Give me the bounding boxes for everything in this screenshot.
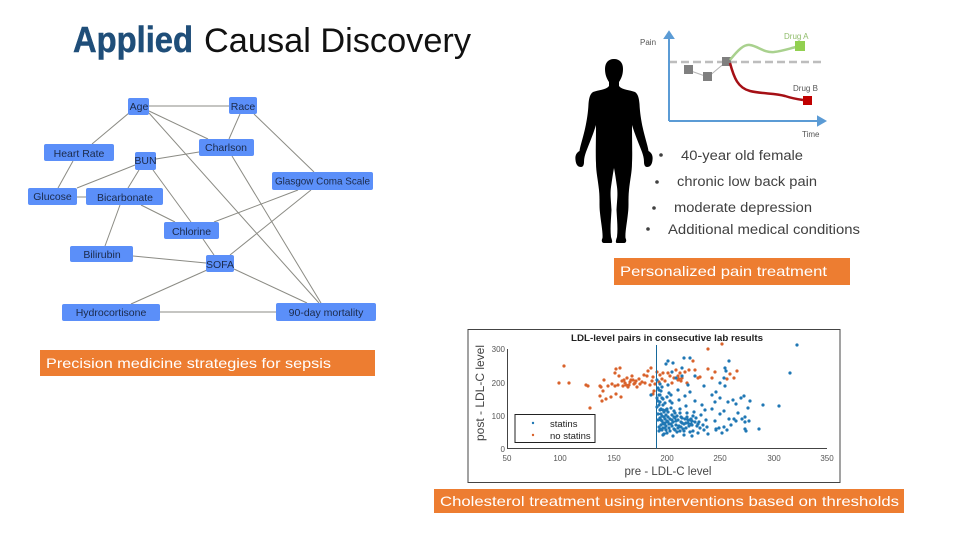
caption: Cholesterol treatment: Cholesterol treatment using interventions based on thresholds xyxy=(440,493,899,509)
Drug A curve xyxy=(730,45,796,60)
x axis ticks: 300 xyxy=(767,454,781,463)
title word: Applied: Applied xyxy=(73,19,193,60)
dashed threshold xyxy=(669,61,824,63)
x axis ticks: 350 xyxy=(820,454,834,463)
chart: pain over time xyxy=(640,32,825,139)
node: Glasgow Coma Scale xyxy=(272,172,373,190)
node: Glucose: Glucose xyxy=(33,191,72,203)
node: Heart Rate: Heart Rate xyxy=(54,148,105,160)
caption: Precision medicine xyxy=(40,350,375,376)
blue points: statins xyxy=(651,345,797,436)
y axis ticks: 100 xyxy=(492,412,506,421)
title words: Causal Discovery: Causal Discovery xyxy=(204,22,471,60)
node: 90-day mortality xyxy=(276,303,376,321)
node: Age xyxy=(128,98,149,115)
Drug B point xyxy=(803,96,812,105)
legend: no statins xyxy=(550,431,591,442)
x axis label: pre - LDL-C level xyxy=(625,466,711,478)
orange points: no statins xyxy=(559,344,737,408)
history points xyxy=(684,57,731,81)
node: Bicarbonate xyxy=(86,188,163,205)
label: Drug B: Drug B xyxy=(793,84,818,93)
graph edges xyxy=(58,106,321,312)
gray history line xyxy=(688,61,727,77)
caption: Personalized pain treatment xyxy=(614,258,850,285)
node: Race xyxy=(229,97,257,114)
node: BUN: BUN xyxy=(134,155,157,167)
caption: Precision medicine: Precision medicine strategies for sepsis xyxy=(46,355,331,371)
y axis arrow xyxy=(665,32,673,121)
node: Glucose xyxy=(28,188,77,205)
y axis ticks: 300 xyxy=(492,345,506,354)
x axis ticks: 100 xyxy=(553,454,567,463)
x axis ticks: 200 xyxy=(660,454,674,463)
caption: Personalized pain treatment: Personalized pain treatment xyxy=(620,263,827,279)
bullet 4: Additional medical conditions xyxy=(668,222,860,237)
bullet 1: 40-year old female xyxy=(681,148,803,163)
y axis ticks xyxy=(492,345,506,454)
node: Hydrocortisone: Hydrocortisone xyxy=(76,307,146,319)
bullet 2: chronic low back pain xyxy=(677,174,817,189)
node: Bilirubin: Bilirubin xyxy=(83,249,121,261)
y axis label: post - LDL-C level xyxy=(473,345,487,441)
label: Drug A: Drug A xyxy=(784,32,809,41)
patient bullet list xyxy=(646,148,860,237)
bullet 3: moderate depression xyxy=(674,200,812,215)
legend xyxy=(515,414,595,442)
panel: LDL scatter plot xyxy=(468,330,840,482)
node: SOFA: SOFA xyxy=(206,259,234,271)
node: Chlorine: Chlorine xyxy=(172,226,211,238)
x axis ticks xyxy=(503,454,834,463)
node: Glasgow Coma Scale: Glasgow Coma Scale xyxy=(275,176,370,188)
node: Race: Race xyxy=(231,101,255,113)
Drug B curve xyxy=(730,63,803,100)
x axis ticks: 150 xyxy=(607,454,621,463)
node: Hydrocortisone xyxy=(62,304,160,321)
Drug A point xyxy=(795,41,805,51)
node: Age: Age xyxy=(130,101,148,113)
y axis ticks: 0 xyxy=(501,445,506,454)
legend: statins xyxy=(550,419,578,430)
node: BUN xyxy=(134,152,157,170)
node: Chlorine xyxy=(164,222,219,239)
threshold line xyxy=(656,345,658,448)
icon: human silhouette xyxy=(575,59,653,243)
label: Time: Time xyxy=(802,130,820,139)
caption: Cholesterol treatment xyxy=(434,489,904,513)
node: Charlson: Charlson xyxy=(205,142,247,154)
panel: causal graph xyxy=(28,97,376,321)
label: Pain: Pain xyxy=(640,38,656,47)
plot title: LDL-level pairs in consecutive lab results xyxy=(571,333,763,344)
node: Bilirubin xyxy=(70,246,133,262)
x axis arrow xyxy=(669,117,825,125)
y axis ticks: 200 xyxy=(492,379,506,388)
node: Bicarbonate: Bicarbonate xyxy=(97,192,153,204)
axes xyxy=(508,349,827,448)
title xyxy=(73,19,471,60)
x axis ticks: 250 xyxy=(713,454,727,463)
x axis ticks: 50 xyxy=(503,454,512,463)
node: Charlson xyxy=(199,139,254,156)
frame xyxy=(468,330,840,482)
node: Heart Rate xyxy=(44,144,114,161)
node: 90-day mortality: 90-day mortality xyxy=(289,307,364,319)
